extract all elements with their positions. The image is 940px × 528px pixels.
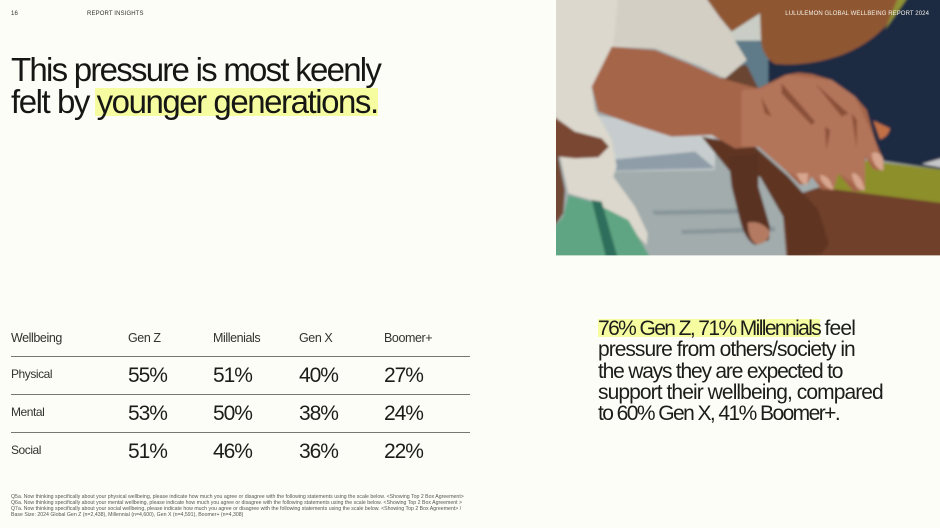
row: social: 36% xyxy=(299,440,338,463)
column headers: Wellbeing xyxy=(11,331,62,345)
row: social: 51% xyxy=(128,440,167,463)
row: physical: Physical xyxy=(11,367,52,381)
callout text: the ways they are expected to xyxy=(598,360,842,382)
footnote xyxy=(11,494,464,518)
title: felt by younger generations. xyxy=(11,83,378,120)
page number: 16 xyxy=(11,11,18,17)
column headers: Gen X xyxy=(299,331,332,345)
data table xyxy=(11,331,470,463)
row: social xyxy=(11,440,424,463)
footnote: Q7a. Now thinking specifically about your social wellbeing, please indicate how much you agree or disagree with the following statements using the scale below. <Showing Top 2 Box Agreement> / xyxy=(11,506,461,512)
title: This pressure is most keenly xyxy=(11,51,380,88)
footnote: Q5a. Now thinking specifically about your physical wellbeing, please indicate how much you agree or disagree with the following statements using the scale below. <Showing Top 2 Box Agreement> xyxy=(11,494,464,500)
row: physical: 51% xyxy=(213,364,252,387)
callout text: 76% Gen Z, 71% Millennials feel xyxy=(598,317,855,340)
column headers xyxy=(11,331,432,345)
row: mental: 38% xyxy=(299,402,338,425)
callout text: support their wellbeing, compared xyxy=(598,381,883,404)
row: mental: Mental xyxy=(11,405,44,419)
callout text: to 60% Gen X, 41% Boomer+. xyxy=(598,402,839,425)
row: mental: 50% xyxy=(213,402,252,425)
row: mental xyxy=(11,402,424,425)
footnote: Base Size: 2024 Global Gen Z (n=2,438), Millennial (n=4,600), Gen X (n=4,591), Boomer+ (n=4,308) xyxy=(11,512,243,518)
photo: arm and hand resting on a leg by the sea xyxy=(556,0,940,256)
footnote: Q6a. Now thinking specifically about your mental wellbeing, please indicate how much you agree or disagree with the following statements using the scale below. <Showing Top 2 Box Agreement > xyxy=(11,500,462,506)
row: physical: 40% xyxy=(299,364,338,387)
column headers: Millenials xyxy=(213,331,260,345)
row: mental: 53% xyxy=(128,402,167,425)
row: social: 46% xyxy=(213,440,252,463)
title xyxy=(11,51,382,120)
title highlight xyxy=(95,88,378,116)
column headers: Boomer+ xyxy=(384,331,432,345)
column headers: Gen Z xyxy=(128,331,161,345)
row: social: 22% xyxy=(384,440,423,463)
row: physical: 55% xyxy=(128,364,167,387)
row: mental: 24% xyxy=(384,402,423,425)
callout highlight xyxy=(598,319,820,337)
row: social: Social xyxy=(11,443,41,457)
section label: REPORT INSIGHTS xyxy=(87,11,144,17)
row: physical xyxy=(11,364,424,387)
callout text: pressure from others/society in xyxy=(598,338,855,361)
row: physical: 27% xyxy=(384,364,423,387)
header label on photo: LULULEMON GLOBAL WELLBEING REPORT 2024 xyxy=(785,11,929,17)
callout text xyxy=(598,317,883,425)
